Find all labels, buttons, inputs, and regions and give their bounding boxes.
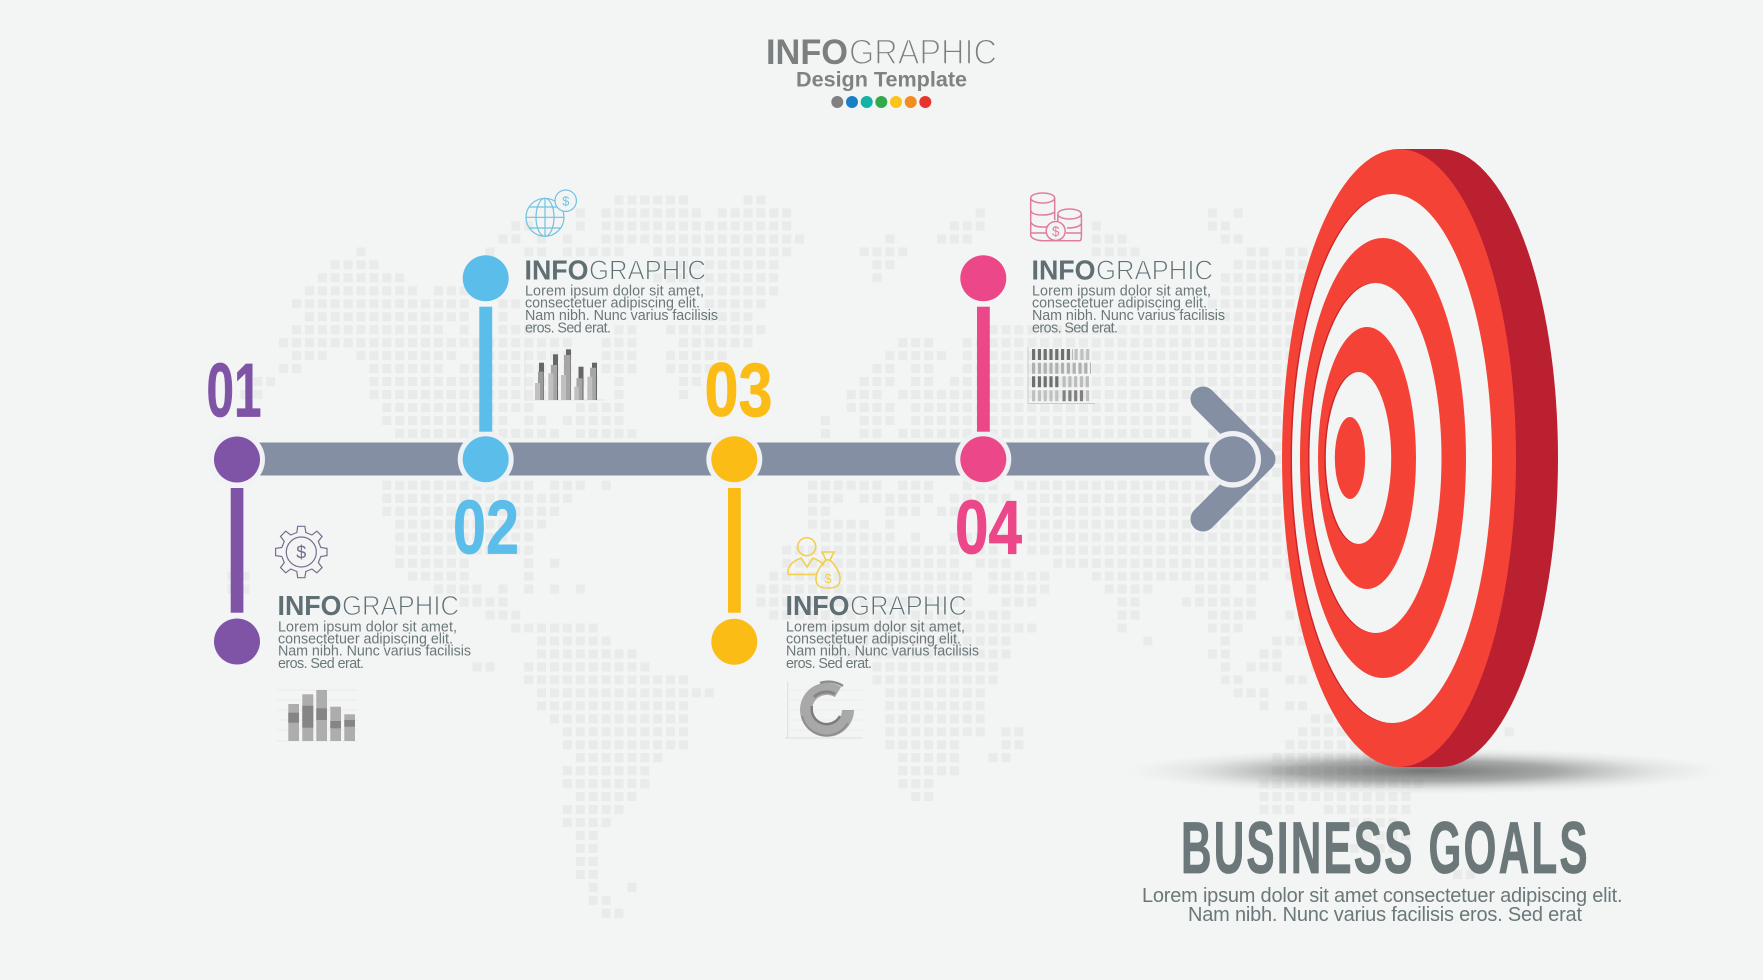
step 1 connector and nodes <box>209 432 265 664</box>
title: infographic design template: GRAPHIC <box>849 33 997 72</box>
panel: step 4 text <box>1032 254 1225 336</box>
text block: business goals description: Lorem ipsum dolor sit amet consectetuer adipiscing elit. <box>1142 885 1622 907</box>
panel: step 4 text: GRAPHIC <box>1096 254 1213 285</box>
background dotted world map <box>228 200 1518 913</box>
panel: step 1 text <box>278 590 471 672</box>
icon: gear with dollar <box>276 526 327 578</box>
title: infographic design template: Design Template <box>796 68 967 92</box>
chart: overlapping bars <box>525 349 605 401</box>
panel: step 1 text: eros. Sed erat. <box>278 656 364 672</box>
panel: step 2 text: GRAPHIC <box>589 254 706 285</box>
panel: step 2 text: Lorem ipsum dolor sit amet, <box>525 284 704 300</box>
panel: step 4 text: eros. Sed erat. <box>1032 320 1118 336</box>
number 02: 02 <box>453 486 519 570</box>
number 04: 04 <box>955 486 1022 570</box>
icon: globe with coin: $ <box>562 194 570 208</box>
panel: step 3 text: consectetuer adipiscing elit. <box>786 632 961 648</box>
text block: business goals description <box>1142 885 1622 926</box>
icon: globe with coin <box>526 190 576 236</box>
panel: step 2 text: consectetuer adipiscing elit. <box>525 296 700 312</box>
panel: step 3 text <box>786 590 979 672</box>
title: infographic design template: INFO <box>766 33 848 72</box>
step 3 connector and nodes <box>706 431 762 665</box>
heading: business goals: BUSINESS GOALS <box>1181 807 1590 889</box>
panel: step 2 text: Nam nibh. Nunc varius facilisis <box>525 308 718 324</box>
target ground shadow <box>1127 748 1723 794</box>
panel: step 3 text: Nam nibh. Nunc varius facilisis <box>786 644 979 660</box>
panel: step 2 text: eros. Sed erat. <box>525 320 611 336</box>
panel: step 3 text: INFO <box>786 590 850 621</box>
icon: gear with dollar: $ <box>296 542 306 562</box>
panel: step 1 text: INFO <box>278 590 342 621</box>
icon: person with money bag <box>788 538 840 588</box>
title: infographic design template <box>766 33 997 108</box>
panel: step 2 text <box>524 254 718 336</box>
panel: step 4 text: consectetuer adipiscing elit. <box>1032 296 1207 312</box>
step 4 connector and nodes <box>955 255 1011 487</box>
target <box>1282 149 1558 767</box>
chart: donut <box>785 682 863 738</box>
chart: stacked bars <box>277 690 358 741</box>
panel: step 4 text: INFO <box>1032 254 1096 285</box>
panel: step 3 text: Lorem ipsum dolor sit amet, <box>786 620 965 636</box>
panel: step 1 text: Nam nibh. Nunc varius facilisis <box>278 644 471 660</box>
chart: people pictogram <box>1028 347 1095 404</box>
step 2 connector and nodes <box>458 255 514 487</box>
panel: step 1 text: Lorem ipsum dolor sit amet, <box>278 620 457 636</box>
panel: step 2 text: INFO <box>524 254 588 285</box>
text block: business goals description: Nam nibh. Nunc varius facilisis eros. Sed erat <box>1188 904 1582 926</box>
number 01: 01 <box>206 348 262 434</box>
panel: step 3 text: GRAPHIC <box>850 590 967 621</box>
number 03: 03 <box>704 348 772 433</box>
panel: step 1 text: GRAPHIC <box>342 590 459 621</box>
icon: person with money bag: $ <box>824 571 832 586</box>
panel: step 4 text: Lorem ipsum dolor sit amet, <box>1032 284 1211 300</box>
panel: step 4 text: Nam nibh. Nunc varius facilisis <box>1032 308 1225 324</box>
timeline arrow <box>250 399 1263 519</box>
icon: coin stacks: $ <box>1052 224 1060 239</box>
panel: step 1 text: consectetuer adipiscing elit. <box>278 632 453 648</box>
panel: step 3 text: eros. Sed erat. <box>786 656 872 672</box>
icon: coin stacks <box>1031 193 1081 241</box>
